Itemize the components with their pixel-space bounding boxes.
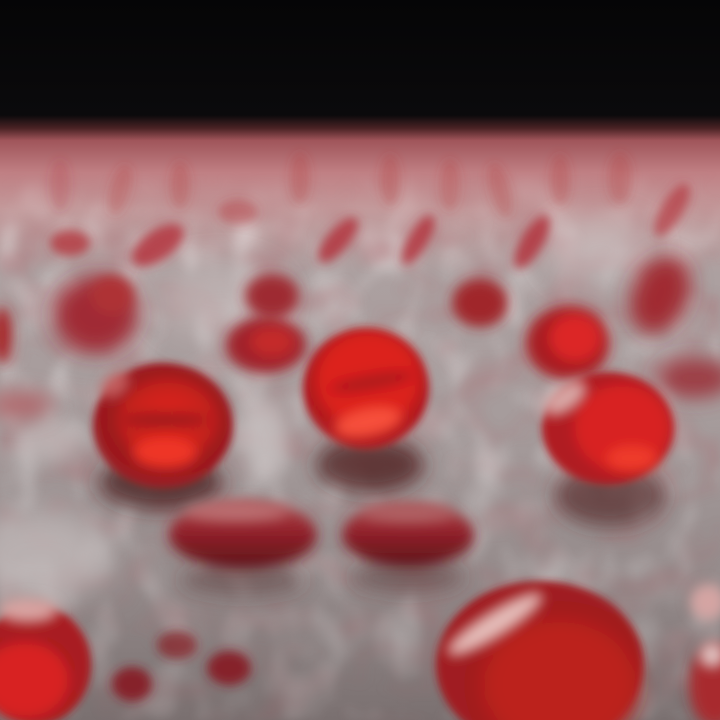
distant row of pink streaks [50, 152, 697, 274]
cell: bottom right edge [689, 584, 720, 720]
large cell: centre [303, 328, 429, 493]
large cell: left centre [93, 363, 233, 510]
mid-distance cells [0, 247, 720, 419]
large cell: bottom centre-right [436, 581, 644, 720]
flat discs: lower centre [169, 501, 474, 595]
large cell: bottom left [0, 598, 91, 720]
large cell: right centre [538, 372, 674, 527]
small cells: bottom [112, 631, 251, 701]
